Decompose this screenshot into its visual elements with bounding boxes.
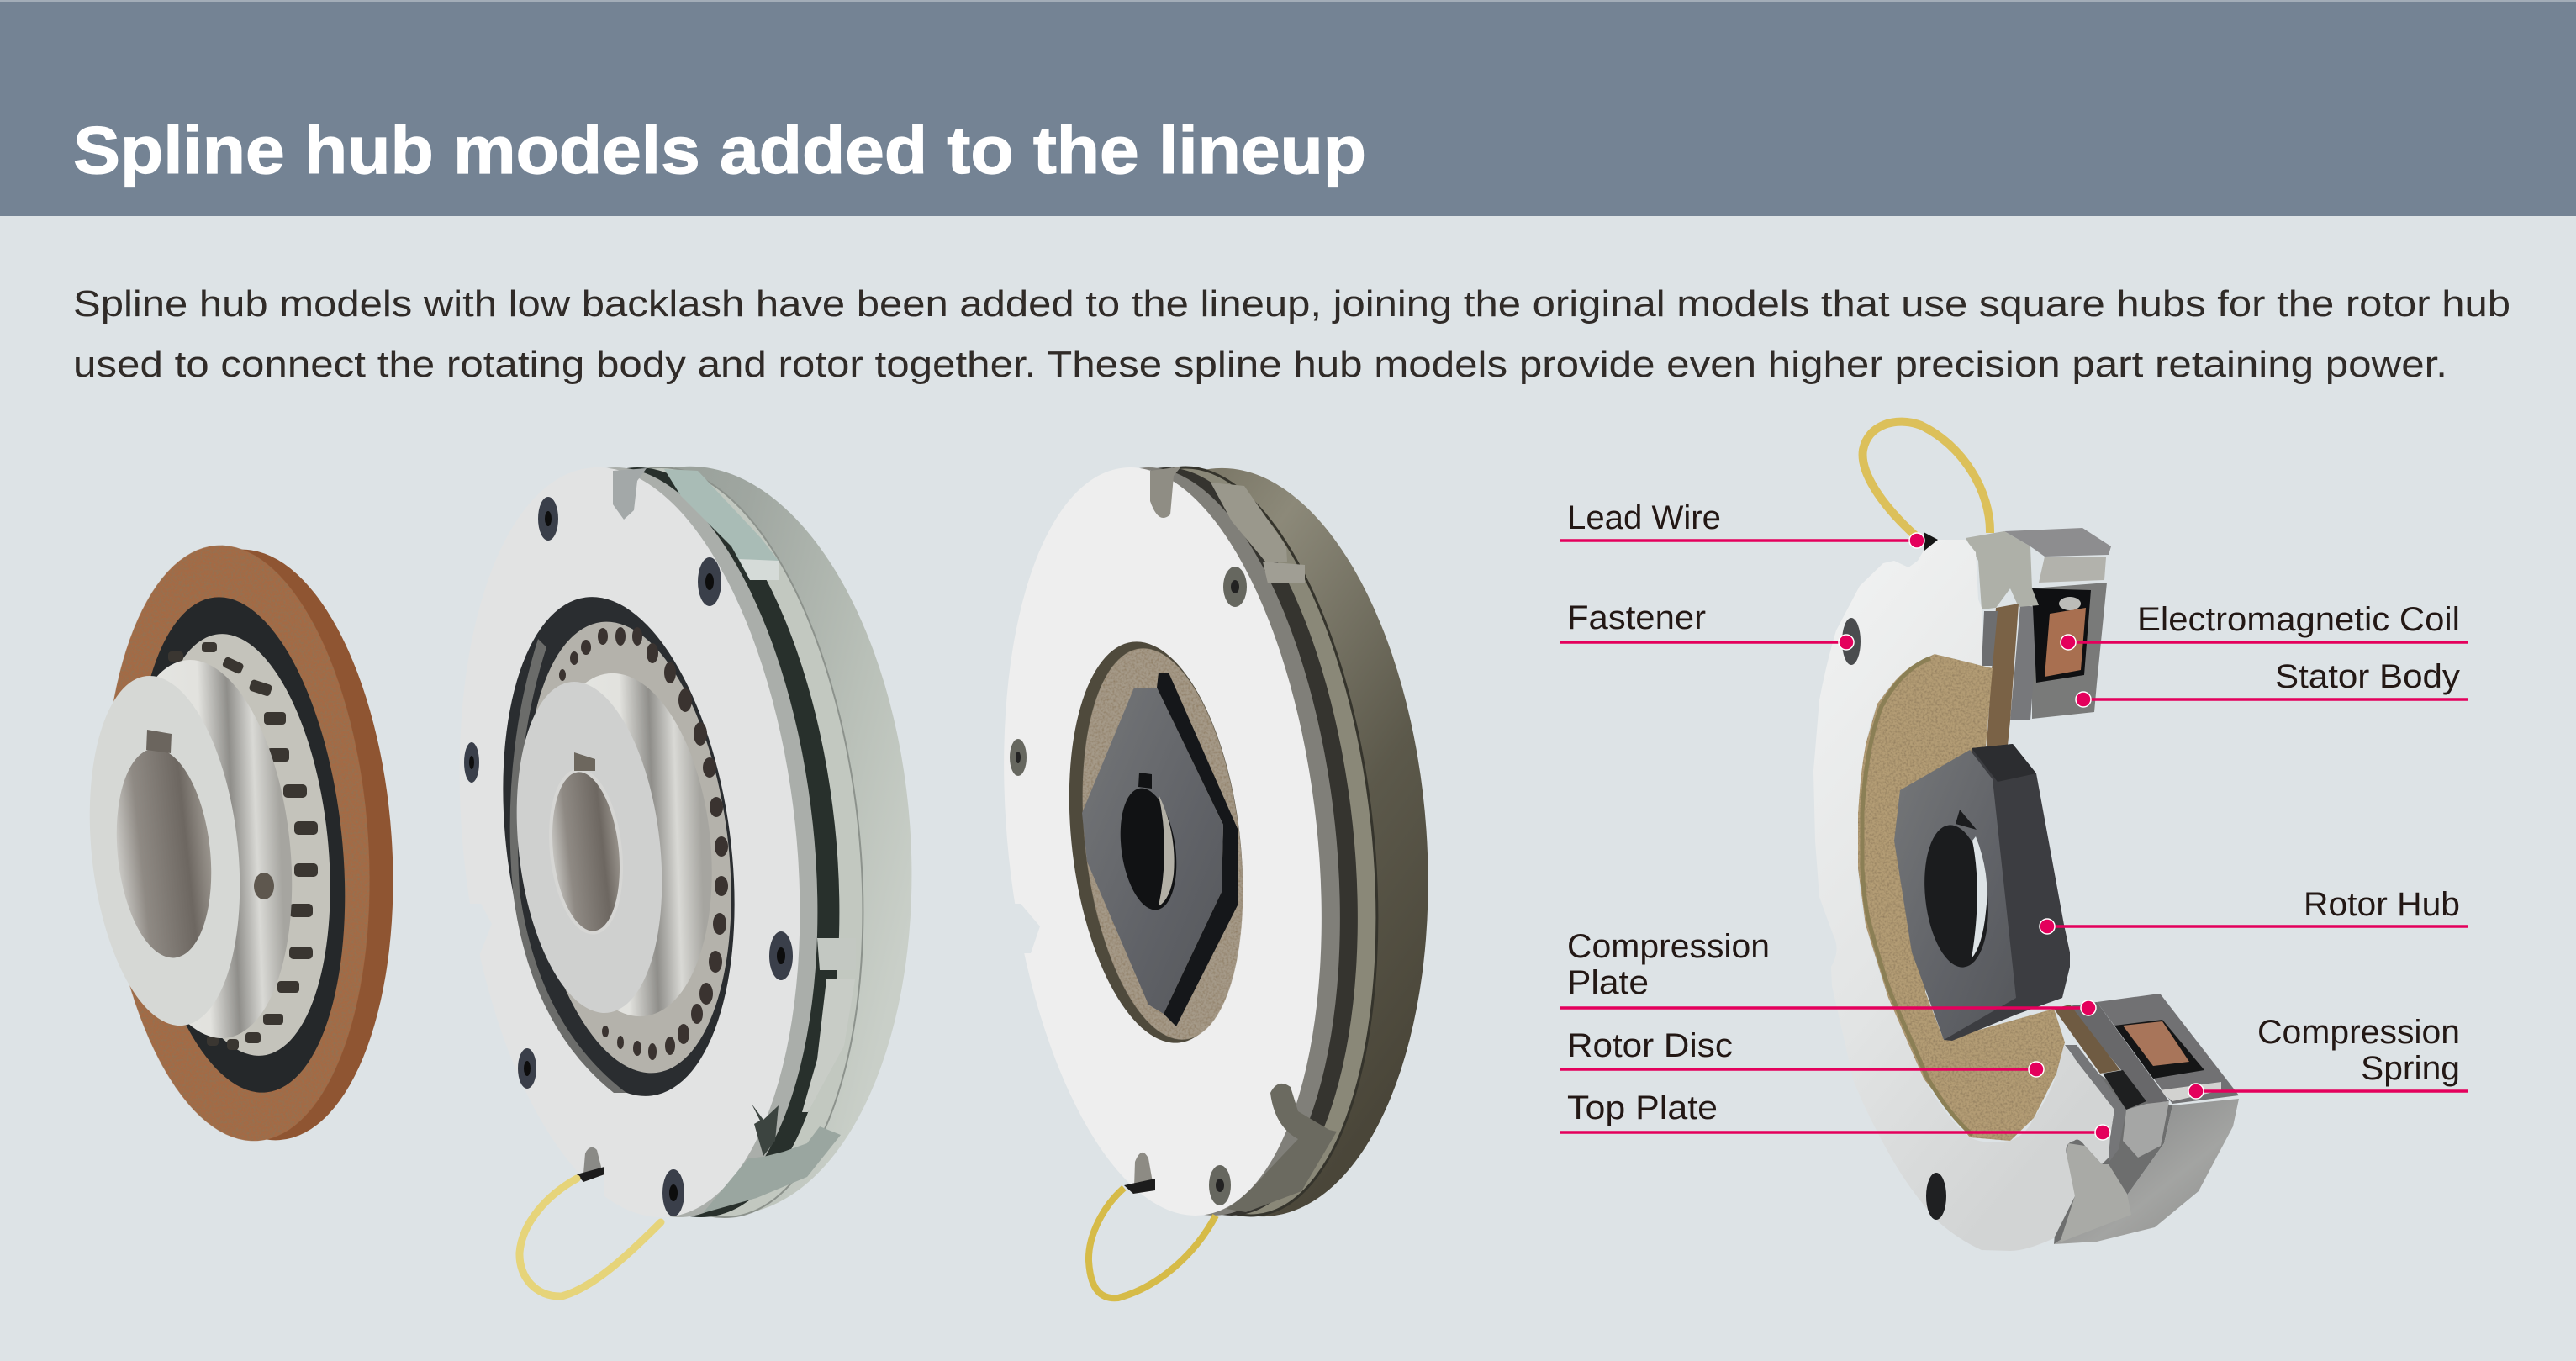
- title: Spline hub models added to the lineup: [73, 113, 1366, 187]
- spline slots: [559, 627, 728, 1060]
- fasteners: [1842, 618, 1946, 1220]
- central opening with rotor disc: [1049, 632, 1263, 1052]
- callout: Lead Wire: [1560, 499, 1924, 548]
- product: rotor disc with spline hub: [74, 536, 412, 1150]
- spline slots: [168, 642, 318, 1050]
- groove pin: [1211, 483, 1305, 583]
- header band: [0, 0, 2576, 216]
- callout: Stator Body: Stator Body: [2275, 658, 2460, 695]
- groove pins and segments: [664, 469, 856, 1112]
- callout: Top Plate: Top Plate: [1567, 1089, 1718, 1126]
- callout: Fastener: [1560, 599, 1854, 650]
- callout: Compression Spring: Compression: [2257, 1014, 2460, 1051]
- callout: Electromagnetic Coil: Electromagnetic Coil: [2137, 601, 2460, 638]
- intro text: [73, 283, 2510, 385]
- lead wire: [1863, 422, 1990, 536]
- callout: Rotor Disc: [1560, 1027, 2044, 1077]
- callout: Top Plate: [1560, 1089, 2110, 1140]
- product: cutaway diagram: [1813, 422, 2239, 1251]
- intro text: used to connect the rotating body and rotor together. These spline hub models provide even higher precision part retaining power.: [73, 344, 2447, 385]
- callout: Stator Body: [2076, 658, 2468, 707]
- rotor rim: [1862, 658, 1972, 1135]
- intro text: Spline hub models with low backlash have been added to the lineup, joining the original models that use square hubs for the rotor hub: [73, 283, 2510, 324]
- callout: Electromagnetic Coil: [2061, 601, 2468, 650]
- callout: Compression Plate: [1560, 928, 2096, 1015]
- fasteners: [464, 497, 793, 1216]
- fasteners: [1010, 567, 1247, 1205]
- plate: [1813, 540, 2114, 1251]
- rotor hub: [1894, 744, 2070, 1041]
- bottom stator body: [2054, 994, 2239, 1244]
- lower stator pieces: [2060, 1045, 2169, 1242]
- product: square hub brake assembly: [969, 451, 1453, 1298]
- wire sleeve: [1924, 532, 1938, 551]
- callout: Rotor Disc: Rotor Disc: [1567, 1027, 1733, 1064]
- callout: Lead Wire: Lead Wire: [1567, 499, 1721, 536]
- callout: Rotor Hub: [2040, 886, 2468, 934]
- callout: Compression Plate: Plate: [1567, 964, 1649, 1001]
- plate notches: [1000, 467, 1337, 1212]
- rotor disc cross-section: [1987, 604, 2019, 746]
- callout: Fastener: Fastener: [1567, 599, 1706, 636]
- top plate side face: [1982, 611, 1998, 666]
- silver top knob: [1966, 531, 2039, 609]
- callout: Rotor Hub: Rotor Hub: [2304, 886, 2460, 923]
- callout: Compression Spring: Spring: [2361, 1050, 2460, 1087]
- rotor hub: [1082, 673, 1238, 1026]
- central opening: [475, 583, 763, 1110]
- product: spline hub brake assembly: [464, 466, 911, 1300]
- lead wire: [1089, 1188, 1216, 1298]
- callout: Compression Plate: Compression: [1567, 928, 1770, 965]
- plate notches: [461, 468, 841, 1237]
- top stator body: [2004, 528, 2111, 720]
- lead wire: [520, 1179, 661, 1296]
- rotor disc: [1858, 654, 2065, 1141]
- callout: Compression Spring: [2188, 1014, 2468, 1099]
- lower stator backing: [2051, 1042, 2172, 1244]
